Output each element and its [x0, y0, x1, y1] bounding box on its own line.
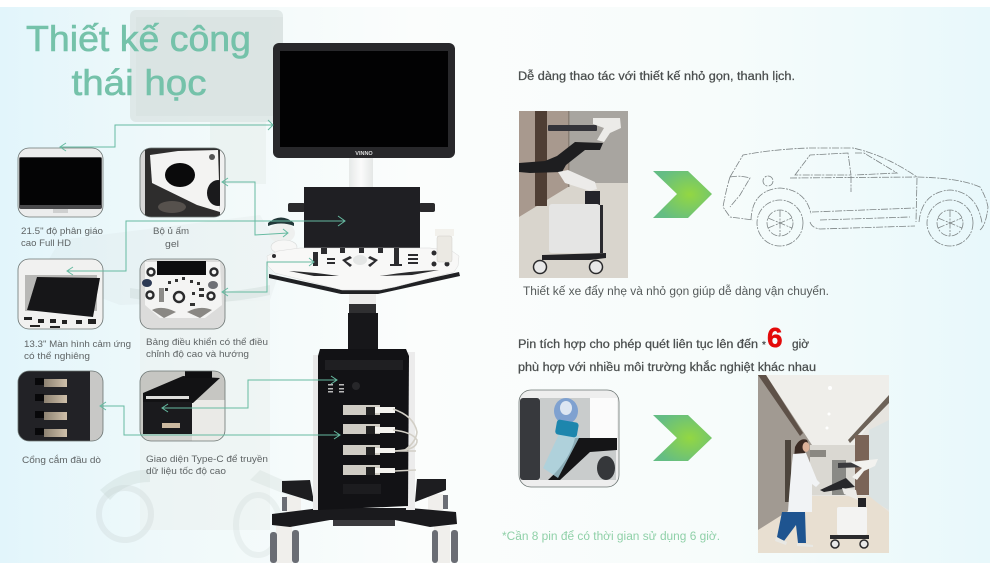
heading: battery runtime — [518, 322, 816, 374]
heading: battery runtime: phù hợp với nhiều môi trường khắc nghiệt khác nhau — [518, 361, 816, 374]
probe ports — [343, 405, 417, 475]
heading: battery runtime: Pin tích hợp cho phép quét liên tục lên đến — [518, 339, 758, 351]
cart body — [313, 349, 417, 510]
heading: compact design: Dễ dàng thao tác với thiết kế nhỏ gọn, thanh lịch. — [518, 70, 795, 83]
main monitor — [273, 43, 455, 158]
ghost machine watermark — [40, 10, 305, 555]
thumbnail frames — [18, 148, 225, 441]
monitor stem — [349, 157, 373, 189]
arrow chevron 2 — [653, 415, 712, 461]
control panel — [267, 229, 460, 294]
gel warmer bottles — [268, 218, 297, 254]
thumbnail captions: Bảng điều khiển có thể điều — [146, 337, 268, 348]
photo: doctor with cart in corridor — [758, 375, 889, 553]
thumbnail: gel warmer — [140, 148, 229, 217]
thumbnail captions: có thể nghiêng — [24, 351, 90, 362]
touch screen — [288, 187, 435, 248]
caption: lightweight cart: Thiết kế xe đẩy nhẹ và nhỏ gọn giúp dễ dàng vận chuyển. — [523, 285, 829, 298]
title — [26, 18, 251, 103]
heading: battery runtime: * — [762, 340, 766, 351]
footnote: *Cần 8 pin để có thời gian sử dụng 6 giờ. — [502, 531, 720, 543]
photo: compact cart — [519, 111, 628, 278]
thumbnail: probe ports — [18, 371, 103, 441]
car line drawing — [723, 148, 988, 246]
cart base and wheels — [270, 479, 458, 563]
thumbnail: 21.5 inch monitor — [18, 148, 103, 217]
thumbnail captions: 13.3" Màn hình cảm ứng — [24, 339, 131, 350]
thumbnail: 13.3 inch touch screen — [18, 259, 103, 329]
big number 6: 6 — [767, 322, 783, 353]
column — [348, 294, 378, 351]
thumbnail captions: Bộ ủ ấm — [153, 226, 189, 237]
thumbnail captions: chỉnh độ cao và hướng — [146, 349, 249, 360]
title: thái học — [72, 62, 206, 103]
thumbnail captions — [21, 226, 268, 477]
thumbnail: type-C interface — [140, 371, 225, 441]
main ultrasound machine — [267, 43, 460, 563]
thumbnail captions: 21.5" độ phân giáo — [21, 226, 103, 237]
thumbnail captions: Cổng cắm đầu dò — [22, 455, 101, 466]
thumbnail: battery — [519, 390, 619, 487]
title: Thiết kế công — [26, 18, 251, 59]
thumbnail captions: dữ liệu tốc độ cao — [146, 466, 226, 477]
thumbnail captions: cao Full HD — [21, 238, 71, 249]
thumbnail captions: Giao diện Type-C để truyền — [146, 454, 268, 465]
thumbnail: control panel — [140, 259, 225, 329]
callout arrows — [60, 120, 345, 439]
thumbnail captions: gel — [165, 239, 179, 250]
heading: battery runtime: giờ — [792, 339, 809, 351]
arrow chevron 1 — [653, 171, 712, 218]
main monitor: VINNO — [355, 151, 373, 157]
